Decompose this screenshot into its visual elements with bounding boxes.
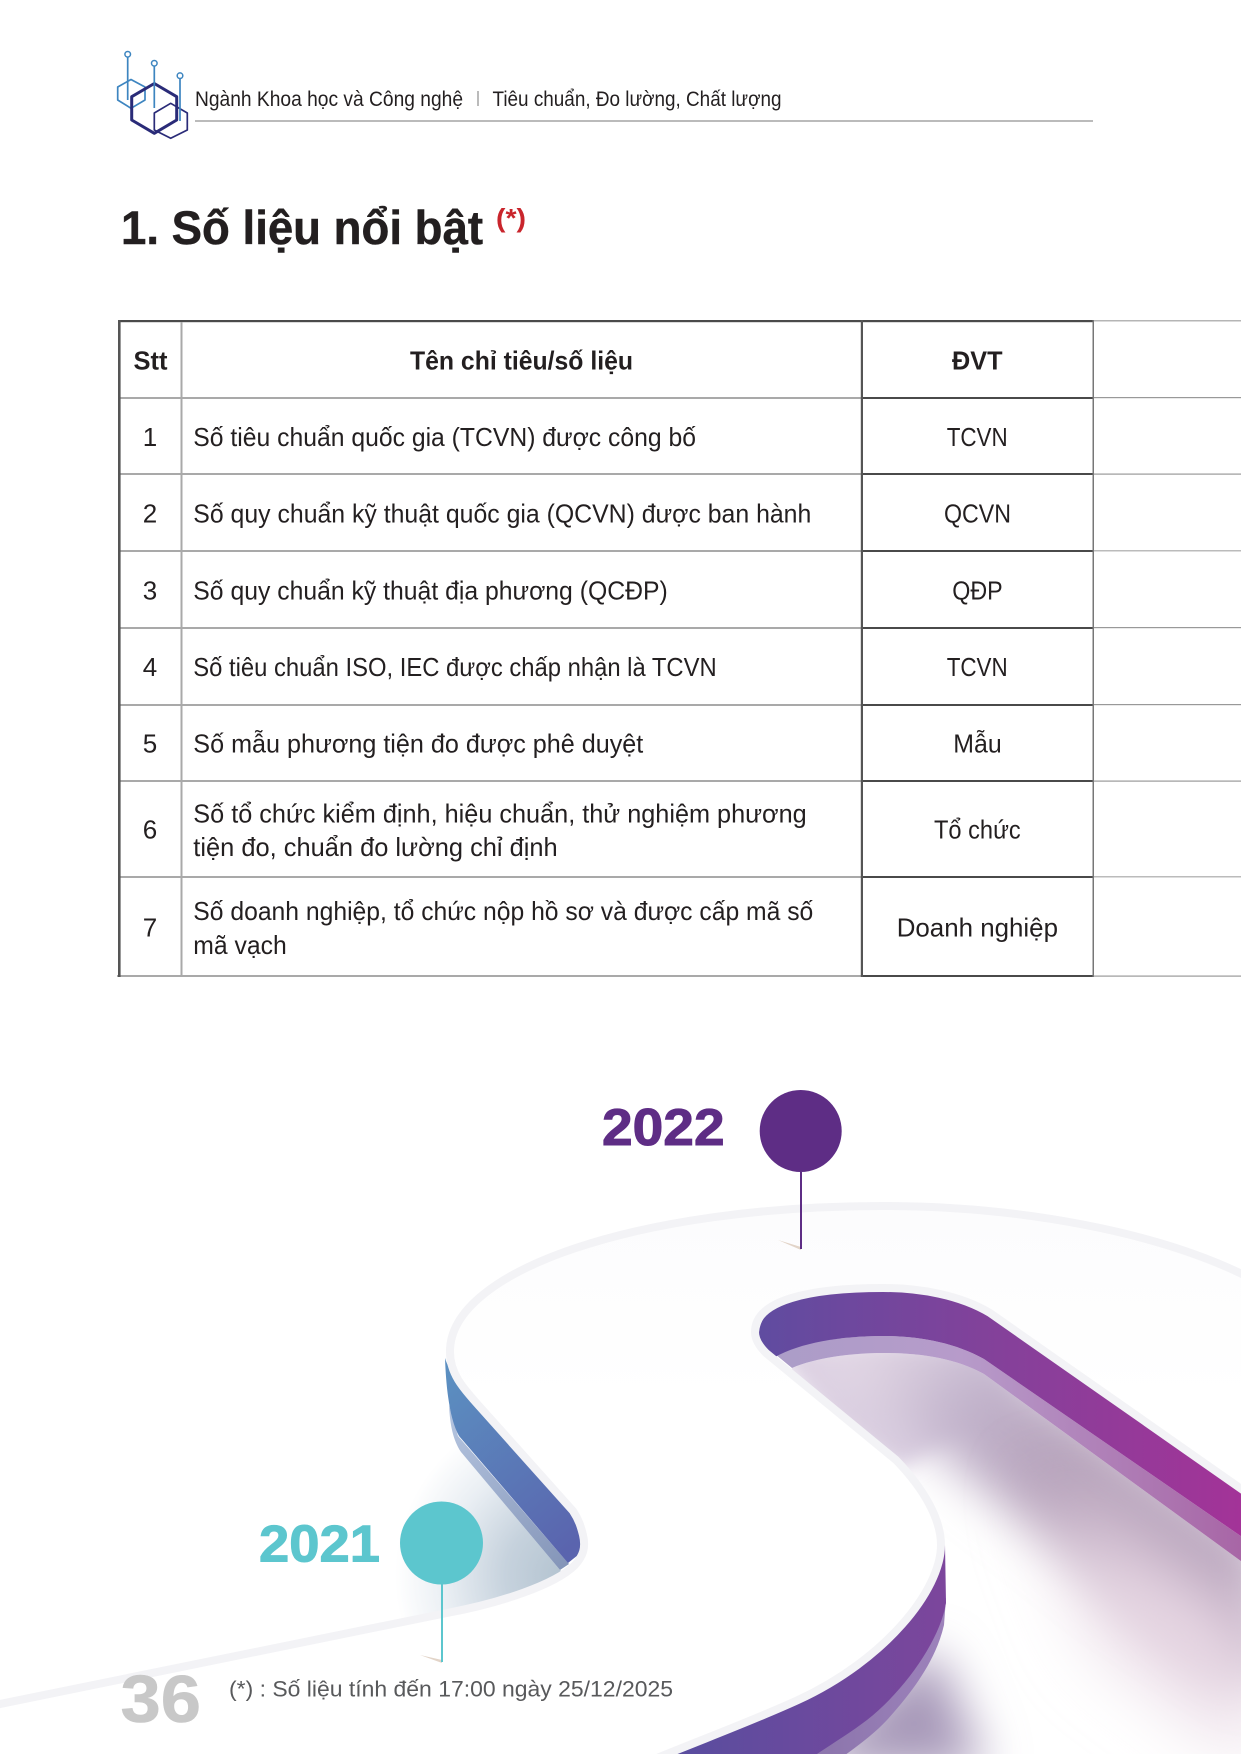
timeline marker 2022: 2022 bbox=[602, 1099, 725, 1157]
table grid bbox=[117, 320, 1241, 977]
road shadow: blue bbox=[380, 1400, 600, 1640]
timeline marker 2021 bbox=[259, 1502, 483, 1663]
purple inner wall bbox=[759, 1285, 1241, 1539]
table header row: ĐVT bbox=[952, 345, 1003, 375]
row 2: 2 bbox=[143, 499, 157, 529]
bottom wall bbox=[640, 1545, 946, 1754]
purple inner wall light band bbox=[775, 1336, 1241, 1564]
blue wall light band bbox=[449, 1405, 569, 1570]
row 6: Tổ chức bbox=[934, 814, 1021, 844]
timeline road illustration bbox=[0, 1206, 1241, 1754]
header breadcrumb text: Tiêu chuẩn, Đo lường, Chất lượng bbox=[492, 88, 782, 111]
title: (*) bbox=[496, 203, 526, 233]
row 7: Số doanh nghiệp, tổ chức nộp hồ sơ và được cấp mã số bbox=[193, 896, 813, 926]
row 3: Số quy chuẩn kỹ thuật địa phương (QCĐP) bbox=[193, 575, 668, 605]
row 1: Số tiêu chuẩn quốc gia (TCVN) được công bố bbox=[193, 422, 696, 452]
page header bbox=[118, 52, 1093, 138]
table header row bbox=[134, 345, 1003, 375]
row 5: Số mẫu phương tiện đo được phê duyệt bbox=[193, 729, 644, 759]
icon: hexagon logo bbox=[118, 52, 187, 138]
header breadcrumb text bbox=[195, 88, 782, 111]
white road surface bbox=[0, 1206, 1241, 1754]
blue wall bbox=[445, 1358, 583, 1563]
row 7 bbox=[143, 896, 1058, 960]
footnote: (*) : Số liệu tính đến 17:00 ngày 25/12/2025 bbox=[229, 1677, 673, 1702]
timeline marker 2022 bbox=[602, 1090, 842, 1250]
row 3 bbox=[143, 575, 1003, 605]
row 7: mã vạch bbox=[193, 930, 287, 960]
row 6 bbox=[143, 799, 1021, 862]
row 2: Số quy chuẩn kỹ thuật quốc gia (QCVN) được ban hành bbox=[193, 499, 811, 529]
road shadow: purple bbox=[770, 1345, 1241, 1754]
row 7: Doanh nghiệp bbox=[897, 913, 1058, 943]
row 1: 1 bbox=[143, 422, 157, 452]
row 4: Số tiêu chuẩn ISO, IEC được chấp nhận là TCVN bbox=[193, 652, 717, 682]
row 6: tiện đo, chuẩn đo lường chỉ định bbox=[193, 832, 558, 862]
row 7: 7 bbox=[143, 913, 157, 943]
header breadcrumb text: Ngành Khoa học và Công nghệ bbox=[195, 88, 463, 111]
row 5: Mẫu bbox=[953, 729, 1002, 759]
row 5 bbox=[143, 729, 1002, 759]
row 4: TCVN bbox=[947, 652, 1008, 682]
row 3: QĐP bbox=[952, 575, 1003, 605]
table header row: Stt bbox=[134, 345, 168, 375]
row 6: 6 bbox=[143, 814, 157, 844]
row 4: 4 bbox=[143, 652, 157, 682]
row 2: QCVN bbox=[944, 499, 1011, 529]
row 4 bbox=[143, 652, 1008, 682]
row 1: TCVN bbox=[947, 422, 1008, 452]
data table bbox=[117, 320, 1241, 977]
page number: 36 bbox=[120, 1662, 201, 1737]
bottom wall light band bbox=[800, 1598, 946, 1754]
row 5: 5 bbox=[143, 729, 157, 759]
row 6: Số tổ chức kiểm định, hiệu chuẩn, thử nghiệm phương bbox=[193, 799, 807, 829]
timeline marker 2021: 2021 bbox=[259, 1516, 380, 1574]
table header row: Tên chỉ tiêu/số liệu bbox=[410, 345, 633, 375]
row 1 bbox=[143, 422, 1008, 452]
row 3: 3 bbox=[143, 575, 157, 605]
title: 1. Số liệu nổi bật bbox=[121, 201, 483, 254]
